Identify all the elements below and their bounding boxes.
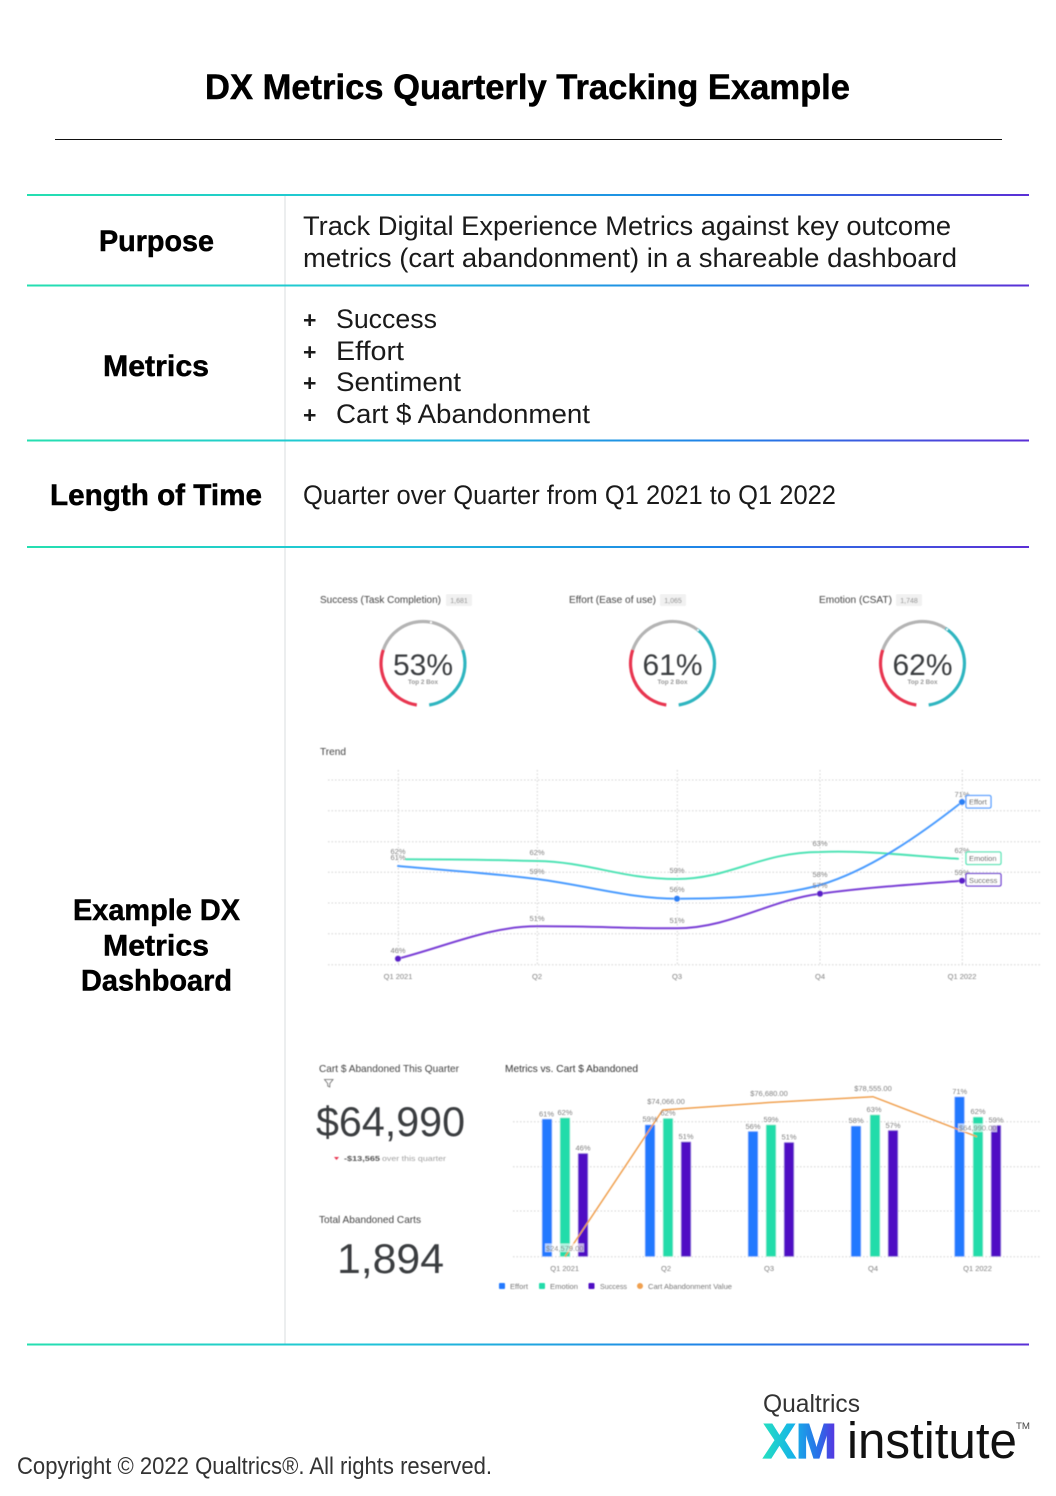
line: success [398, 881, 962, 959]
legend: Effort [510, 1282, 529, 1291]
row: metrics [103, 304, 591, 429]
title: DX Metrics Quarterly Tracking Example [205, 68, 850, 107]
line chart: trend: Trend [320, 746, 346, 758]
bar chart: metrics vs cart abandoned: 59% [763, 1115, 779, 1124]
bar chart: metrics vs cart abandoned: Q1 2022 [963, 1264, 992, 1273]
icon: down triangle [334, 1157, 339, 1160]
gauge: success: 1,681 [450, 598, 468, 605]
bar chart: metrics vs cart abandoned: 58% [848, 1116, 864, 1125]
bar chart: metrics vs cart abandoned: 61% [539, 1110, 554, 1118]
line chart: trend: Q1 2021 [384, 972, 412, 981]
line chart: trend: 62% [529, 848, 545, 857]
tag: effort: Effort [969, 798, 988, 806]
heading: metrics: Metrics [103, 350, 209, 383]
line chart: trend: 59% [954, 868, 970, 877]
legend: Cart Abandonment Value [648, 1282, 732, 1291]
heading: example dx metrics dashboard: Example DX [73, 894, 240, 927]
gauge: success: Top 2 Box [408, 680, 439, 686]
line chart: trend: Q4 [815, 972, 825, 981]
metrics list: + [303, 370, 316, 396]
gauge: success: 53% [393, 649, 453, 682]
bar chart: metrics vs cart abandoned: $74,066.00 [647, 1097, 685, 1106]
bar chart: metrics vs cart abandoned: 62% [557, 1108, 573, 1117]
gauge: success: Success (Task Completion) [320, 595, 441, 606]
line chart: trend: 56% [669, 885, 685, 894]
bars: success [578, 1125, 1001, 1257]
bar chart: metrics vs cart abandoned: 57% [885, 1121, 901, 1130]
metrics list: Sentiment [336, 367, 462, 397]
legend: Emotion [550, 1282, 578, 1291]
bar chart: metrics vs cart abandoned: 62% [970, 1107, 986, 1116]
bar chart: metrics vs cart abandoned: 56% [745, 1122, 761, 1131]
heading: example dx metrics dashboard: Metrics [103, 930, 209, 962]
line chart: trend [320, 746, 1042, 981]
gauge: emotion [819, 594, 964, 705]
bar chart: metrics vs cart abandoned: 63% [866, 1105, 882, 1114]
legend: Success [600, 1282, 627, 1291]
bars: effort [542, 1097, 964, 1257]
line chart: trend: 57% [812, 881, 828, 890]
bar chart: metrics vs cart abandoned: 46% [575, 1144, 591, 1152]
gauge: effort: Effort (Ease of use) [569, 595, 656, 606]
bars: emotion [560, 1115, 983, 1257]
line chart: trend: 59% [669, 866, 685, 875]
copyright: Copyright © 2022 Qualtrics®. All rights reserved. [17, 1453, 492, 1480]
tag: effort [966, 796, 991, 808]
logo: qualtrics xm institute: XM [763, 1415, 837, 1469]
metrics list: Success [336, 304, 437, 334]
gauge: effort: Top 2 Box [658, 680, 688, 686]
heading: example dx metrics dashboard [73, 894, 240, 998]
line chart: trend: 62% [954, 846, 970, 855]
gauge: effort: 1,065 [664, 598, 682, 605]
metrics list: + [303, 339, 316, 365]
line chart: trend: 59% [529, 867, 545, 876]
kpi: cart abandoned [316, 1063, 465, 1163]
purpose text: metrics (cart abandonment) in a shareable dashboard [303, 243, 957, 273]
bar chart: metrics vs cart abandoned: 71% [952, 1087, 968, 1096]
gauge: emotion: Top 2 Box [908, 680, 938, 686]
purpose text [303, 211, 957, 273]
line: emotion [406, 852, 958, 879]
length of time text: Quarter over Quarter from Q1 2021 to Q1 2022 [303, 480, 836, 510]
kpi: total abandoned carts: Total Abandoned Carts [319, 1214, 421, 1226]
tag: success [966, 874, 1001, 886]
heading: example dx metrics dashboard: Dashboard [81, 964, 232, 998]
metrics list: Effort [336, 336, 405, 366]
tag: success: Success [969, 876, 998, 885]
legend [499, 1282, 732, 1291]
bar chart: metrics vs cart abandoned: $64,990.00 [959, 1124, 996, 1132]
bar chart: metrics vs cart abandoned: Q3 [764, 1264, 774, 1273]
line chart: trend: Q2 [532, 972, 542, 981]
line chart: trend: 51% [669, 916, 685, 925]
bar chart: metrics vs cart abandoned: 59% [988, 1116, 1004, 1124]
gauge: effort: 61% [642, 649, 702, 682]
bar chart: metrics vs cart abandoned: 59% [642, 1114, 658, 1124]
line chart: trend: 51% [529, 914, 545, 923]
line chart: trend: 46% [390, 946, 406, 955]
line chart: trend: 58% [812, 870, 828, 879]
metrics list: + [303, 307, 316, 333]
line chart: trend: 63% [812, 839, 828, 848]
bar chart: metrics vs cart abandoned: $24,579.00 [546, 1244, 583, 1253]
bar chart: metrics vs cart abandoned: Q4 [868, 1264, 878, 1273]
bar chart: metrics vs cart abandoned: Metrics vs. Cart $ Abandoned [505, 1063, 638, 1075]
logo: qualtrics xm institute: Qualtrics [763, 1390, 860, 1418]
row: purpose [99, 211, 957, 273]
logo: qualtrics xm institute [763, 1390, 1030, 1469]
purpose text: Track Digital Experience Metrics against key outcome [303, 211, 951, 241]
kpi: total abandoned carts [319, 1214, 444, 1282]
gauge: emotion: 62% [892, 649, 952, 682]
gauge: emotion: Emotion (CSAT) [819, 595, 892, 606]
heading: purpose: Purpose [99, 225, 214, 258]
bar chart: metrics vs cart abandoned: 62% [660, 1108, 676, 1118]
row: length of time [50, 479, 836, 512]
line chart: trend: 62% [390, 847, 406, 856]
gauge: effort [569, 594, 714, 705]
bar chart: metrics vs cart abandoned: 51% [781, 1132, 797, 1142]
kpi: cart abandoned: over this quarter [382, 1154, 447, 1163]
kpi: cart abandoned: -$13,565 [344, 1154, 380, 1163]
line chart: trend: 71% [954, 790, 970, 799]
gauge: success [320, 594, 472, 705]
logo: qualtrics xm institute: institute [847, 1412, 1017, 1469]
line chart: trend: Q3 [672, 972, 682, 981]
kpi: cart abandoned: $64,990 [316, 1098, 465, 1145]
heading: length of time: Length of Time [50, 479, 262, 512]
bar chart: metrics vs cart abandoned: Q2 [661, 1264, 671, 1273]
tag: emotion: Emotion [969, 854, 997, 863]
bar chart: metrics vs cart abandoned: $76,680.00 [750, 1089, 788, 1098]
line: effort [398, 802, 962, 899]
tag: emotion [966, 852, 1001, 864]
bar chart: metrics vs cart abandoned: 51% [678, 1132, 694, 1141]
bar chart: metrics vs cart abandoned: Q1 2021 [550, 1264, 579, 1273]
line: cart abandonment value [565, 1097, 977, 1257]
bar chart: metrics vs cart abandoned [499, 1063, 1040, 1291]
line chart: trend: 61% [390, 853, 406, 862]
kpi: cart abandoned: Cart $ Abandoned This Quarter [319, 1063, 459, 1075]
metrics list [303, 304, 591, 429]
logo: qualtrics xm institute: TM [1016, 1421, 1030, 1431]
icon: filter [324, 1080, 333, 1087]
metrics list: + [303, 402, 316, 428]
panel: dashboard [316, 594, 1042, 1291]
kpi: total abandoned carts: 1,894 [337, 1235, 444, 1282]
line chart: trend: Q1 2022 [948, 972, 976, 981]
bar chart: metrics vs cart abandoned: $78,555.00 [854, 1084, 892, 1093]
gauge: emotion: 1,748 [900, 598, 918, 605]
metrics list: Cart $ Abandonment [336, 399, 591, 429]
